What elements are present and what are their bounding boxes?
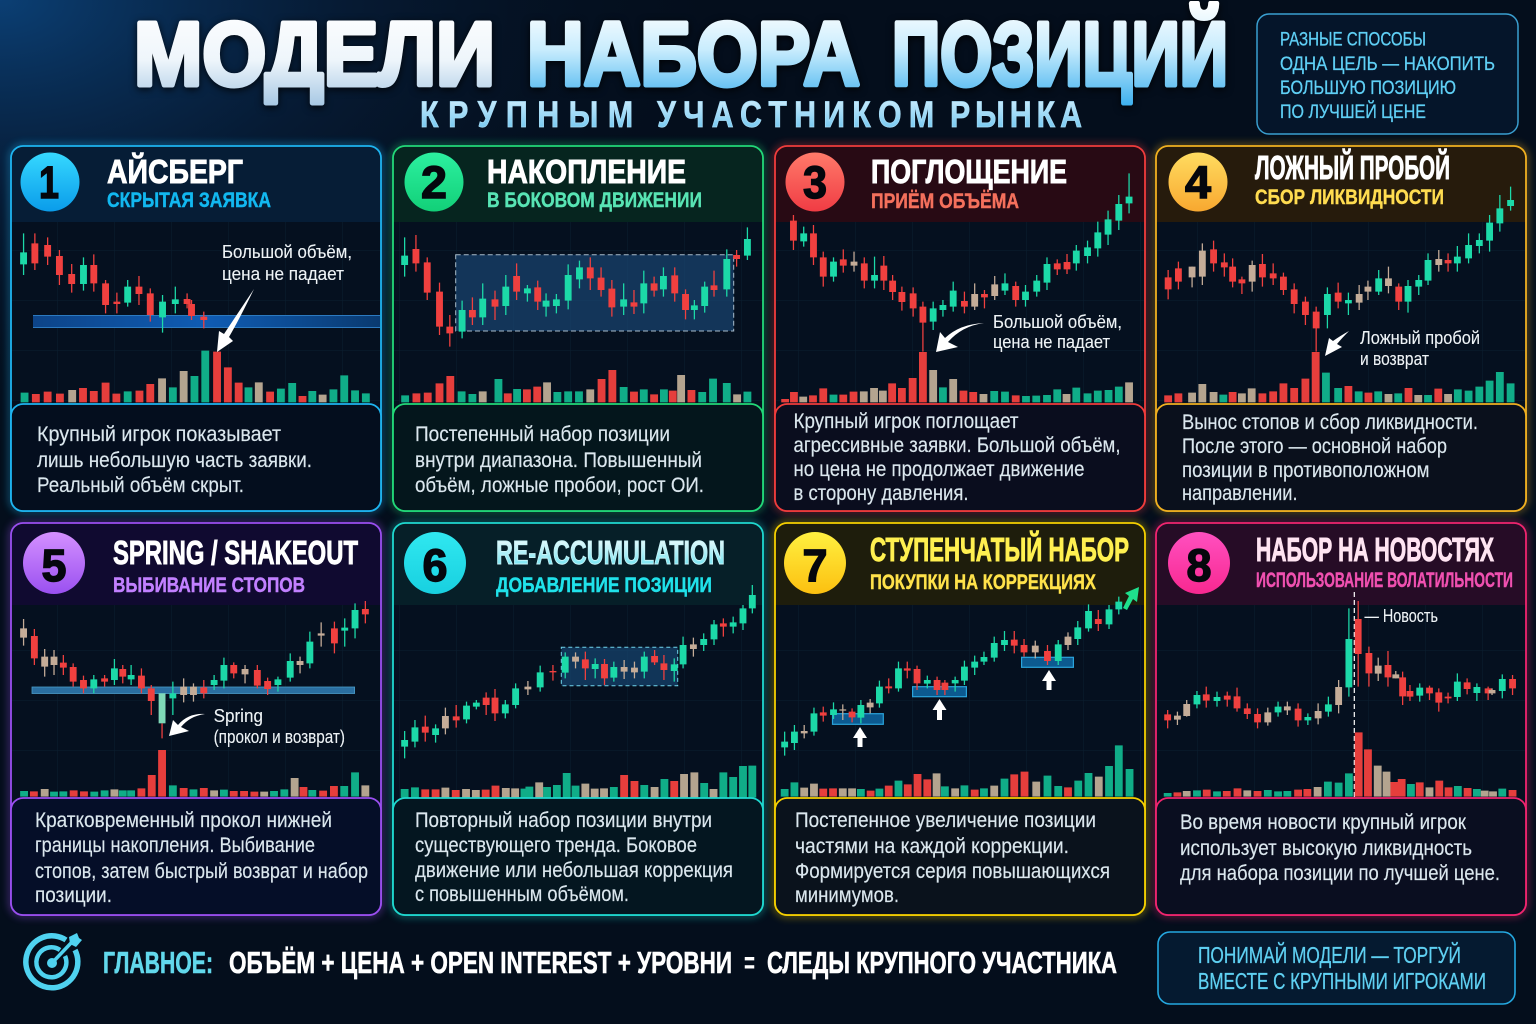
title: [134, 2, 1228, 105]
support band: [32, 687, 355, 694]
correction zones: [832, 657, 1073, 724]
arrow 4: [1325, 331, 1349, 356]
annotation 4: [1360, 327, 1480, 369]
number badge 4: 4: [1185, 157, 1211, 208]
bottom formula: =: [744, 945, 755, 980]
subtitle: УЧАСТНИКОМ: [657, 94, 934, 136]
heading 1: [107, 152, 271, 212]
panel 3: поглощение: [775, 146, 1145, 511]
description 5: стопов, затем быстрый возврат и набор: [35, 860, 368, 883]
volume 3: [785, 352, 1129, 402]
candles 6: [405, 585, 752, 758]
heading 5: ВЫБИВАНИЕ СТОПОВ: [113, 574, 305, 597]
description 7: [775, 798, 1145, 915]
heading 6: ДОБАВЛЕНИЕ ПОЗИЦИИ: [496, 574, 712, 597]
annotation 1: [222, 241, 352, 284]
heading 5: SPRING / SHAKEOUT: [113, 534, 358, 571]
candles 3: [793, 173, 1129, 352]
heading 4: [1255, 148, 1450, 209]
annotation 4: и возврат: [1360, 348, 1429, 369]
heading 2: [487, 153, 702, 212]
description 5: Кратковременный прокол нижней: [35, 809, 332, 832]
number badge 7: [784, 532, 846, 594]
description 2: Постепенный набор позиции: [415, 423, 670, 446]
volume 1: [25, 351, 366, 402]
volume 5: [24, 750, 365, 797]
volume 8: [1168, 732, 1513, 797]
number badge 3: 3: [803, 157, 827, 208]
description 8: Во время новости крупный игрок: [1180, 811, 1467, 834]
heading 1: АЙСБЕРГ: [107, 152, 243, 190]
heading 5: [113, 534, 358, 597]
description 8: использует высокую ликвидность: [1180, 837, 1472, 860]
re-accumulation box: [561, 647, 678, 686]
annotation 1: Большой объём,: [222, 241, 352, 262]
description 3: но цена не продолжает движение: [794, 458, 1084, 481]
info box top right: ПО ЛУЧШЕЙ ЦЕНЕ: [1280, 99, 1426, 123]
title: ПОЗИЦИЙ: [892, 2, 1228, 105]
heading 2: В БОКОВОМ ДВИЖЕНИИ: [487, 189, 702, 212]
panel 5: spring: [11, 523, 381, 915]
news marker line: [1353, 592, 1355, 797]
heading 8: [1256, 531, 1513, 592]
description 1: Реальный объём скрыт.: [37, 474, 244, 497]
annotation 5: (прокол и возврат): [214, 726, 345, 747]
info box top right: РАЗНЫЕ СПОСОБЫ: [1280, 28, 1426, 50]
description 5: границы накопления. Выбивание: [35, 834, 315, 857]
description 8: для набора позиции по лучшей цене.: [1180, 862, 1500, 885]
description 6: с повышенным объёмом.: [415, 883, 629, 906]
number badge 7: 7: [802, 540, 828, 591]
number badge 2: 2: [421, 157, 447, 208]
annotation 3: цена не падает: [993, 331, 1110, 352]
number badge 5: 5: [42, 540, 66, 591]
description 6: движение или небольшая коррекция: [415, 859, 733, 882]
description 1: лишь небольшую часть заявки.: [37, 449, 312, 472]
info box top right: [1257, 14, 1518, 134]
heading 7: СТУПЕНЧАТЫЙ НАБОР: [870, 530, 1129, 568]
panel 6: re-accumulation: [393, 523, 763, 915]
number badge 8: 8: [1186, 540, 1212, 591]
description 1: [11, 404, 381, 511]
candles 1: [24, 233, 204, 333]
description 4: После этого — основной набор: [1182, 435, 1447, 458]
panel 1: айсберг: [11, 146, 381, 511]
arrow 1: [217, 289, 254, 352]
description 2: объём, ложные пробои, рост ОИ.: [415, 474, 704, 497]
description 6: Повторный набор позиции внутри: [415, 809, 712, 832]
description 4: позиции в противоположном: [1182, 459, 1430, 482]
heading 3: [871, 153, 1067, 213]
annotation 3: [993, 311, 1122, 352]
description 4: [1156, 404, 1526, 511]
description 6: [393, 798, 763, 915]
description 3: [775, 404, 1145, 511]
description 7: Постепенное увеличение позиции: [795, 809, 1096, 832]
candles 2: [405, 227, 747, 347]
subtitle: РЫНКА: [950, 94, 1082, 136]
callout bottom right: [1158, 932, 1515, 1004]
arrow 5: [169, 714, 205, 736]
candles 5: [24, 601, 365, 738]
annotation 4: Ложный пробой: [1360, 327, 1480, 348]
description 4: направлении.: [1182, 482, 1298, 505]
subtitle: КРУПНЫМ: [420, 94, 633, 136]
trend arrow: [1123, 587, 1139, 610]
description 2: [393, 404, 763, 511]
number badge 6: [404, 532, 466, 594]
volume 4: [1168, 352, 1511, 402]
heading 6: RE-ACCUMULATION: [496, 534, 725, 571]
title: НАБОРА: [527, 5, 860, 105]
number badge 5: [23, 532, 85, 594]
annotation 5: Spring: [214, 705, 263, 726]
description 3: в сторону давления.: [794, 482, 968, 505]
subtitle: [420, 94, 1082, 136]
annotation 5: [214, 705, 345, 747]
description 3: Крупный игрок поглощает: [794, 410, 1019, 433]
annotation 3: Большой объём,: [993, 311, 1122, 332]
heading 1: СКРЫТАЯ ЗАЯВКА: [107, 189, 271, 212]
description 7: частями на каждой коррекции.: [795, 835, 1069, 858]
heading 7: ПОКУПКИ НА КОРРЕКЦИЯХ: [870, 571, 1096, 594]
description 1: Крупный игрок показывает: [37, 423, 281, 446]
description 4: Вынос стопов и сбор ликвидности.: [1182, 411, 1478, 434]
heading 2: НАКОПЛЕНИЕ: [487, 153, 686, 190]
heading 3: ПОГЛОЩЕНИЕ: [871, 153, 1067, 190]
panel 4: ложный пробой: [1156, 146, 1526, 511]
heading 3: ПРИЁМ ОБЪЁМА: [871, 190, 1019, 213]
heading 7: [870, 530, 1129, 594]
arrow 3: [936, 323, 984, 352]
number badge 1: [20, 152, 80, 212]
number badge 6: 6: [422, 540, 448, 591]
accumulation range box: [456, 255, 734, 331]
number badge 8: [1168, 532, 1230, 594]
up arrows: [853, 670, 1056, 747]
title: МОДЕЛИ: [134, 5, 495, 105]
description 7: минимумов.: [795, 884, 899, 907]
volume 2: [405, 370, 747, 402]
candles 7: [785, 597, 1119, 756]
description 3: агрессивные заявки. Большой объём,: [794, 434, 1120, 457]
bottom formula: ГЛАВНОЕ:: [103, 945, 213, 980]
bottom formula: [103, 945, 1117, 980]
panel 8: набор на новостях: [1156, 523, 1526, 915]
info box top right: ОДНА ЦЕЛЬ — НАКОПИТЬ: [1280, 53, 1495, 75]
number badge 2: [404, 152, 464, 212]
annotation 1: цена не падает: [222, 263, 344, 284]
description 7: Формируется серия повышающихся: [795, 860, 1110, 883]
panel 7: ступенчатый набор: [775, 523, 1145, 915]
info box top right: БОЛЬШУЮ ПОЗИЦИЮ: [1280, 77, 1456, 99]
number badge 3: [786, 152, 844, 212]
description 5: [11, 798, 381, 915]
candles 8: [1168, 601, 1513, 728]
heading 4: СБОР ЛИКВИДНОСТИ: [1255, 186, 1444, 209]
description 2: внутри диапазона. Повышенный: [415, 449, 702, 472]
description 6: существующего тренда. Боковое: [415, 834, 697, 857]
description 8: [1156, 798, 1526, 915]
bottom formula: СЛЕДЫ КРУПНОГО УЧАСТНИКА: [767, 945, 1117, 980]
candles 4: [1168, 187, 1511, 352]
number badge 1: 1: [39, 157, 59, 208]
volume 7: [785, 745, 1130, 797]
heading 6: [496, 534, 725, 597]
bottom formula: ОБЪЁМ + ЦЕНА + OPEN INTEREST + УРОВНИ: [229, 945, 732, 980]
news label: — Новость: [1364, 605, 1438, 626]
number badge 4: [1168, 152, 1228, 212]
description 5: позиции.: [35, 884, 112, 907]
icon: target: [26, 933, 82, 988]
support level band: [33, 315, 380, 328]
panel 2: накопление: [393, 146, 763, 511]
volume 6: [405, 766, 752, 798]
